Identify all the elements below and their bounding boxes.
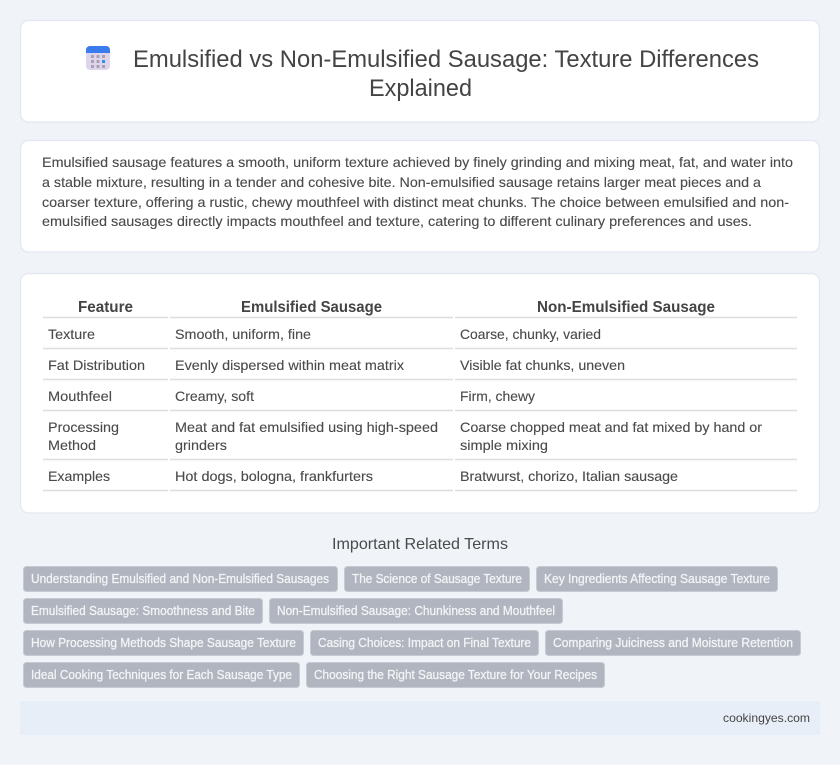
heading: related terms: Important Related Terms	[332, 536, 508, 553]
title: Explained	[369, 75, 472, 102]
tag	[24, 662, 300, 688]
tag: How Processing Methods Shape Sausage Texture	[31, 636, 296, 650]
table row: mouthfeel	[48, 388, 535, 404]
table row: examples: Bratwurst, chorizo, Italian sausage	[460, 468, 678, 484]
text block: description: coarser texture, offering a rustic, chewy mouthfeel with distinct meat chunks. The choice between emulsified and non-	[42, 194, 789, 210]
table row: fat distribution: Fat Distribution	[48, 357, 145, 373]
tag: Understanding Emulsified and Non-Emulsified Sausages	[31, 572, 329, 586]
tag: Casing Choices: Impact on Final Texture	[318, 636, 531, 650]
tag: Ideal Cooking Techniques for Each Sausage Type	[31, 668, 292, 682]
title	[133, 46, 759, 102]
tag	[270, 598, 562, 624]
text block: description: emulsified sausages directly impacts mouthfeel and texture, catering to different culinary preferences and uses.	[42, 213, 752, 229]
tag	[24, 598, 262, 624]
tag	[24, 566, 338, 592]
table row: processing method: grinders	[175, 437, 227, 453]
tag: Non-Emulsified Sausage: Chunkiness and Mouthfeel	[277, 604, 555, 618]
table row: fat distribution: Visible fat chunks, uneven	[460, 357, 625, 373]
table row: examples: Examples	[48, 468, 110, 484]
table header: Feature	[78, 299, 133, 316]
table row: mouthfeel: Creamy, soft	[175, 388, 254, 404]
table row: texture: Coarse, chunky, varied	[460, 326, 601, 342]
panel: description	[20, 140, 820, 252]
table row: fat distribution	[48, 357, 625, 373]
table row: processing method: Method	[48, 437, 96, 453]
tag: Choosing the Right Sausage Texture for Your Recipes	[314, 668, 597, 682]
table row: processing method	[48, 419, 762, 453]
table row: processing method: Coarse chopped meat and fat mixed by hand or	[460, 419, 762, 435]
footer: cookingyes.com	[723, 711, 810, 725]
table row: mouthfeel: Mouthfeel	[48, 388, 112, 404]
table row: texture: Smooth, uniform, fine	[175, 326, 311, 342]
table row: examples	[48, 468, 678, 484]
tag	[536, 566, 778, 592]
table row: texture: Texture	[48, 326, 95, 342]
text block: description: Emulsified sausage features a smooth, uniform texture achieved by finely grinding and mixing meat, fat, and water into	[42, 154, 793, 170]
tag	[344, 566, 530, 592]
table row: mouthfeel: Firm, chewy	[460, 388, 535, 404]
title: Emulsified vs Non-Emulsified Sausage: Texture Differences	[133, 46, 759, 73]
tag	[24, 630, 304, 656]
table header: Non-Emulsified Sausage	[537, 299, 715, 316]
table row: processing method: Processing	[48, 419, 119, 435]
tag: Key Ingredients Affecting Sausage Texture	[544, 572, 770, 586]
icon: calendar	[86, 46, 110, 70]
table row: texture	[48, 326, 601, 342]
tag: The Science of Sausage Texture	[352, 572, 522, 586]
table row: processing method: simple mixing	[460, 437, 548, 453]
panel: comparison table	[20, 274, 820, 513]
footer	[20, 701, 820, 735]
panel: header	[20, 20, 820, 122]
table row: fat distribution: Evenly dispersed within meat matrix	[175, 357, 404, 373]
tag	[546, 630, 800, 656]
tag: Comparing Juiciness and Moisture Retention	[553, 636, 793, 650]
text block: description: a stable mixture, resulting in a tender and cohesive bite. Non-emulsified sausage retains larger meat pieces and a	[42, 174, 761, 190]
tag: Emulsified Sausage: Smoothness and Bite	[31, 604, 255, 618]
table row: processing method: Meat and fat emulsified using high-speed	[175, 419, 438, 435]
tag	[306, 662, 604, 688]
text block: description	[42, 154, 793, 229]
related term tags	[24, 566, 800, 688]
table header: Emulsified Sausage	[241, 299, 382, 316]
tag	[310, 630, 538, 656]
table header	[78, 299, 715, 316]
table row: examples: Hot dogs, bologna, frankfurters	[175, 468, 373, 484]
